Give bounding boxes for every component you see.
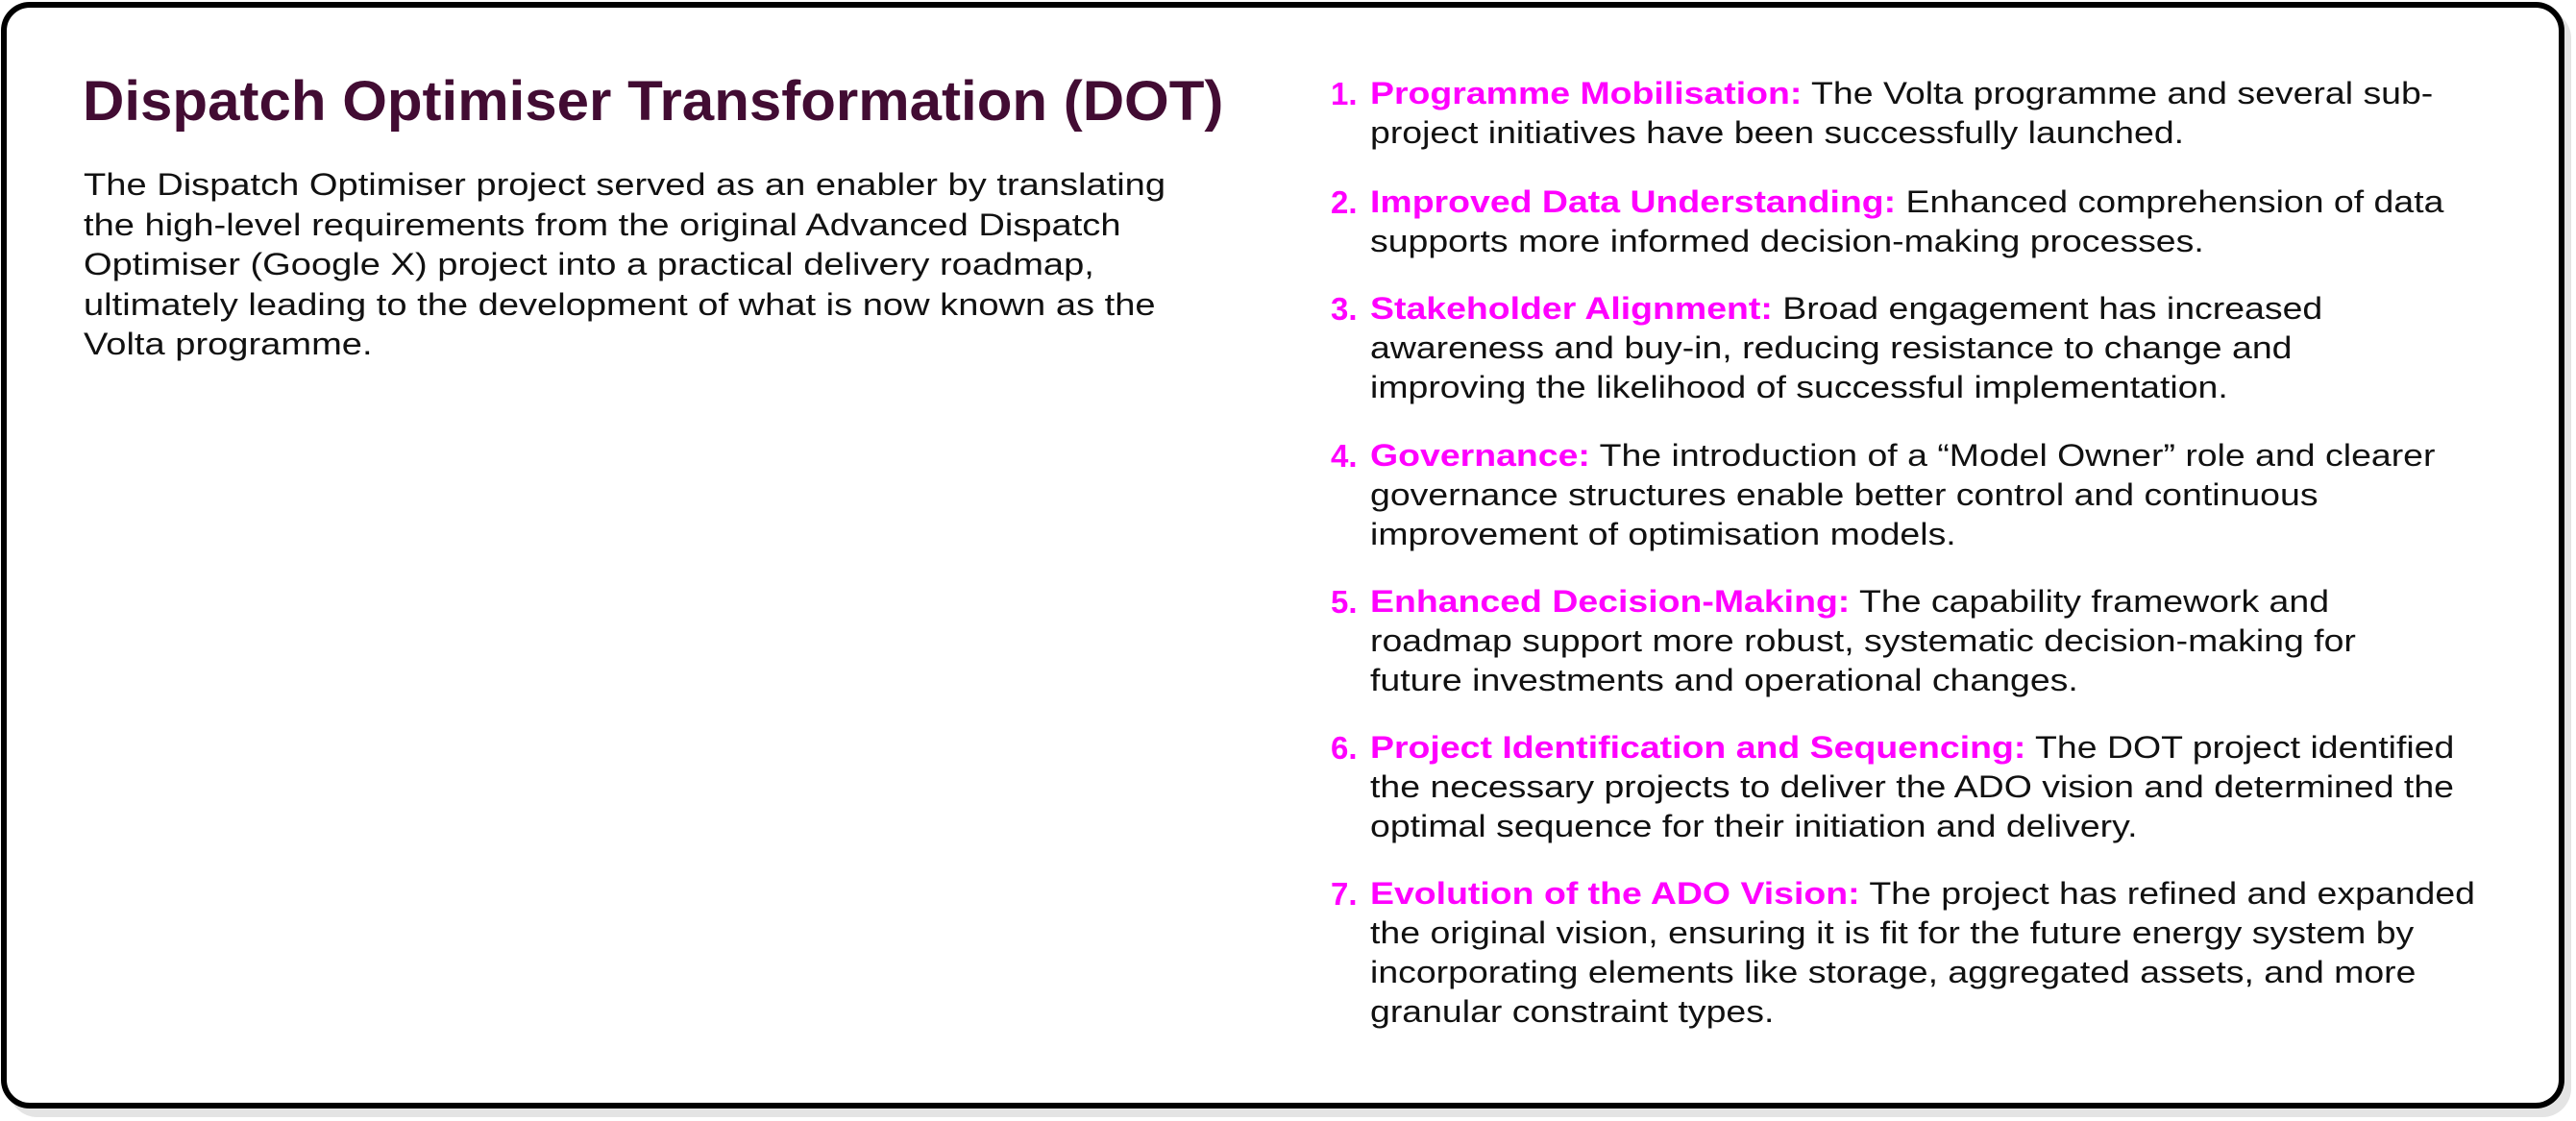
list item 3: Stakeholder Alignment: Broad engagement has increased [1370,291,2322,326]
list item 6 [1331,730,2454,843]
list item 6: 6. [1331,730,1358,766]
list item 3: awareness and buy-in, reducing resistance to change and [1370,330,2292,365]
list item 5: future investments and operational changes. [1370,663,2078,697]
text block: intro [84,167,1165,361]
list item 4: Governance: The introduction of a “Model Owner” role and clearer [1370,438,2435,473]
list item 1: 1. [1331,76,1358,111]
list item 6: the necessary projects to deliver the ADO vision and determined the [1370,769,2454,804]
list item 5: 5. [1331,584,1358,620]
list item 7: the original vision, ensuring it is fit for the future energy system by [1370,915,2414,950]
list item 7: granular constraint types. [1370,994,1774,1029]
list item 3 [1331,291,2322,404]
text block: intro: ultimately leading to the development of what is now known as the [84,286,1156,321]
text block: intro: Optimiser (Google X) project into a practical delivery roadmap, [84,247,1094,281]
list item 3: 3. [1331,291,1358,327]
list item 4: governance structures enable better control and continuous [1370,477,2318,512]
list item 4: improvement of optimisation models. [1370,517,1956,551]
list item 1 [1331,76,2433,150]
list item 7 [1331,876,2475,1029]
text block: intro: Volta programme. [84,327,373,361]
list item 2: supports more informed decision-making processes. [1370,224,2204,258]
text block: intro: the high-level requirements from the original Advanced Dispatch [84,207,1121,242]
list item 6: optimal sequence for their initiation and delivery. [1370,809,2137,843]
list item 5: Enhanced Decision-Making: The capability framework and [1370,584,2329,619]
list item 7: 7. [1331,876,1358,912]
list item 5: roadmap support more robust, systematic decision-making for [1370,623,2356,658]
text block: intro: The Dispatch Optimiser project served as an enabler by translating [84,167,1165,202]
list item 4 [1331,438,2435,551]
list item 6: Project Identification and Sequencing: The DOT project identified [1370,730,2454,765]
list item 2 [1331,184,2444,258]
list item 7: incorporating elements like storage, aggregated assets, and more [1370,955,2416,989]
list item 1: project initiatives have been successfully launched. [1370,115,2184,150]
list item 1: Programme Mobilisation: The Volta programme and several sub- [1370,76,2433,110]
title: Dispatch Optimiser Transformation (DOT) [83,70,1223,133]
list item 5 [1331,584,2356,697]
list item 3: improving the likelihood of successful implementation. [1370,370,2228,404]
list item 4: 4. [1331,438,1358,474]
list item 2: 2. [1331,184,1358,220]
list item 2: Improved Data Understanding: Enhanced comprehension of data [1370,184,2443,219]
list item 7: Evolution of the ADO Vision: The project has refined and expanded [1370,876,2475,911]
